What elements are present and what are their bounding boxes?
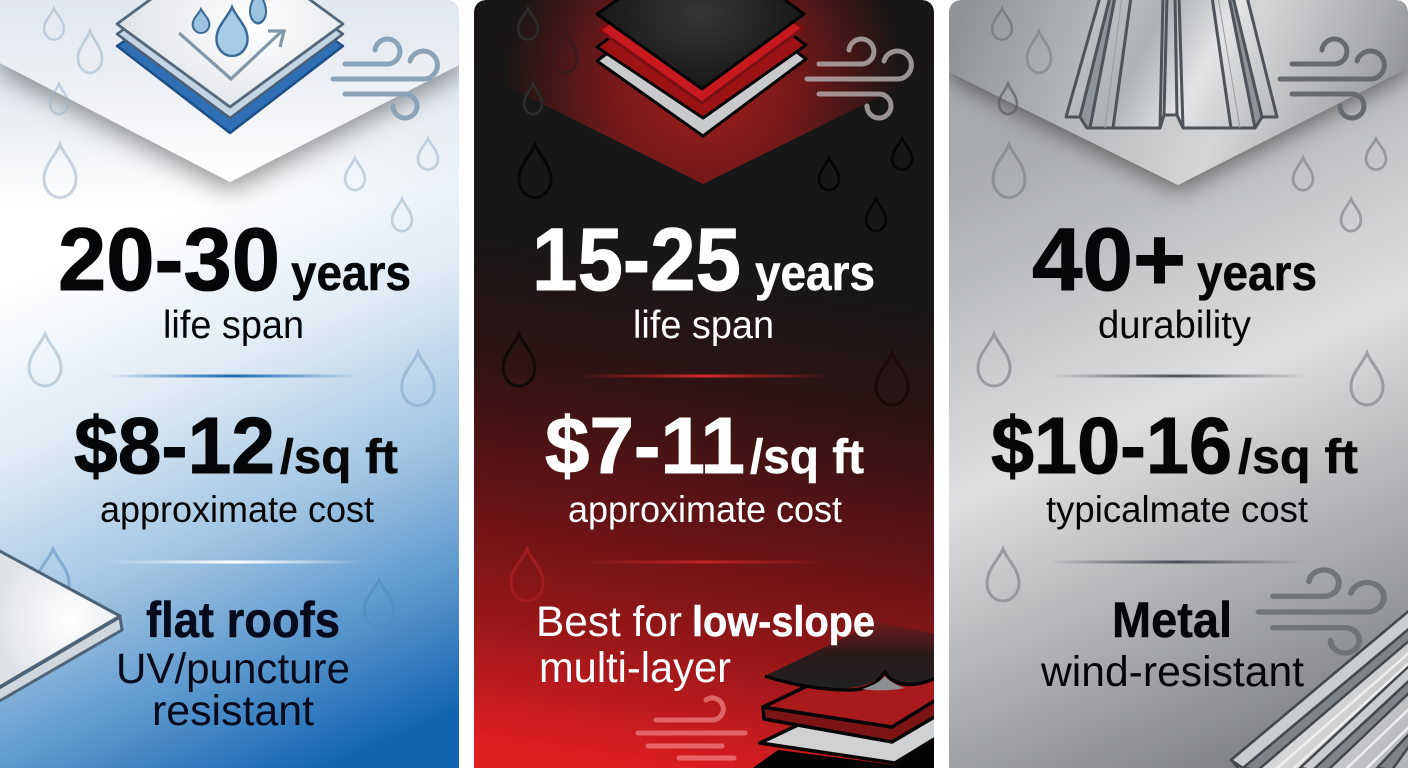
best use text: Metal <box>1112 592 1232 648</box>
cost stat: $8-12 <box>74 401 275 490</box>
cost stat: typicalmate cost <box>1046 489 1309 530</box>
life span stat <box>1032 227 1316 346</box>
life span stat: years <box>291 245 411 301</box>
best use text: wind-resistant <box>1040 648 1304 696</box>
life span stat: 20-30 <box>58 209 280 309</box>
cost stat: $10-16 <box>991 401 1232 490</box>
best use text: UV/puncture <box>116 645 350 693</box>
cost stat: approximate cost <box>100 489 375 530</box>
panel: flat roof membrane (blue) <box>0 0 459 768</box>
icon: corrugated metal roof corner <box>1231 610 1408 768</box>
cost stat <box>991 401 1358 530</box>
best use text <box>536 598 875 692</box>
cost stat: $7-11 <box>545 401 745 490</box>
panel: metal roof (silver) <box>949 0 1408 768</box>
cost stat: /sq ft <box>750 431 864 484</box>
icon: membrane sheet corner <box>0 549 122 703</box>
icon: membrane layers with water drops <box>117 0 343 133</box>
icon: background water drops <box>978 8 1386 601</box>
panel 2 chevron header <box>474 0 934 184</box>
best use text <box>1041 600 1304 686</box>
panel 1 upper grey tint <box>0 0 459 172</box>
panel: multi-layer membrane (black and red) <box>474 0 936 768</box>
life span stat <box>60 227 410 346</box>
cost stat <box>74 401 398 530</box>
life span stat: 40+ <box>1032 209 1186 309</box>
icon: wind <box>807 39 911 118</box>
cost stat <box>545 401 864 530</box>
life span stat: life span <box>163 304 304 347</box>
panel 2 background gradient <box>474 0 934 768</box>
icon: background water drops <box>503 8 912 601</box>
life span stat: 15-25 <box>532 209 741 309</box>
cost stat: /sq ft <box>1238 431 1358 484</box>
best use text: flat roofs <box>146 592 340 648</box>
icon: black and red membrane layers <box>597 0 806 136</box>
life span stat: years <box>755 245 875 301</box>
panel 3 chevron header <box>949 0 1408 185</box>
icon: wind <box>1259 570 1384 653</box>
life span stat: years <box>1197 245 1317 301</box>
life span stat <box>536 227 874 346</box>
icon: layered membrane corner <box>750 622 936 768</box>
icon: background water drops <box>29 8 438 626</box>
best use text: multi-layer <box>539 644 731 692</box>
life span stat: durability <box>1098 304 1251 347</box>
cost stat: approximate cost <box>568 489 843 530</box>
best use text: Best for <box>536 598 682 646</box>
icon: wind lines <box>638 698 745 758</box>
life span stat: life span <box>633 304 774 347</box>
cost stat: /sq ft <box>280 431 398 484</box>
icon: standing seam metal panel <box>1066 0 1277 128</box>
icon: wind <box>333 39 437 118</box>
panel 1 chevron header <box>0 0 459 182</box>
best use text: resistant <box>152 687 314 735</box>
panel 3 background <box>949 0 1408 768</box>
panel 1 background <box>0 153 459 768</box>
best use text: low-slope <box>692 598 875 646</box>
best use text <box>119 600 348 726</box>
icon: wind <box>1280 39 1384 118</box>
